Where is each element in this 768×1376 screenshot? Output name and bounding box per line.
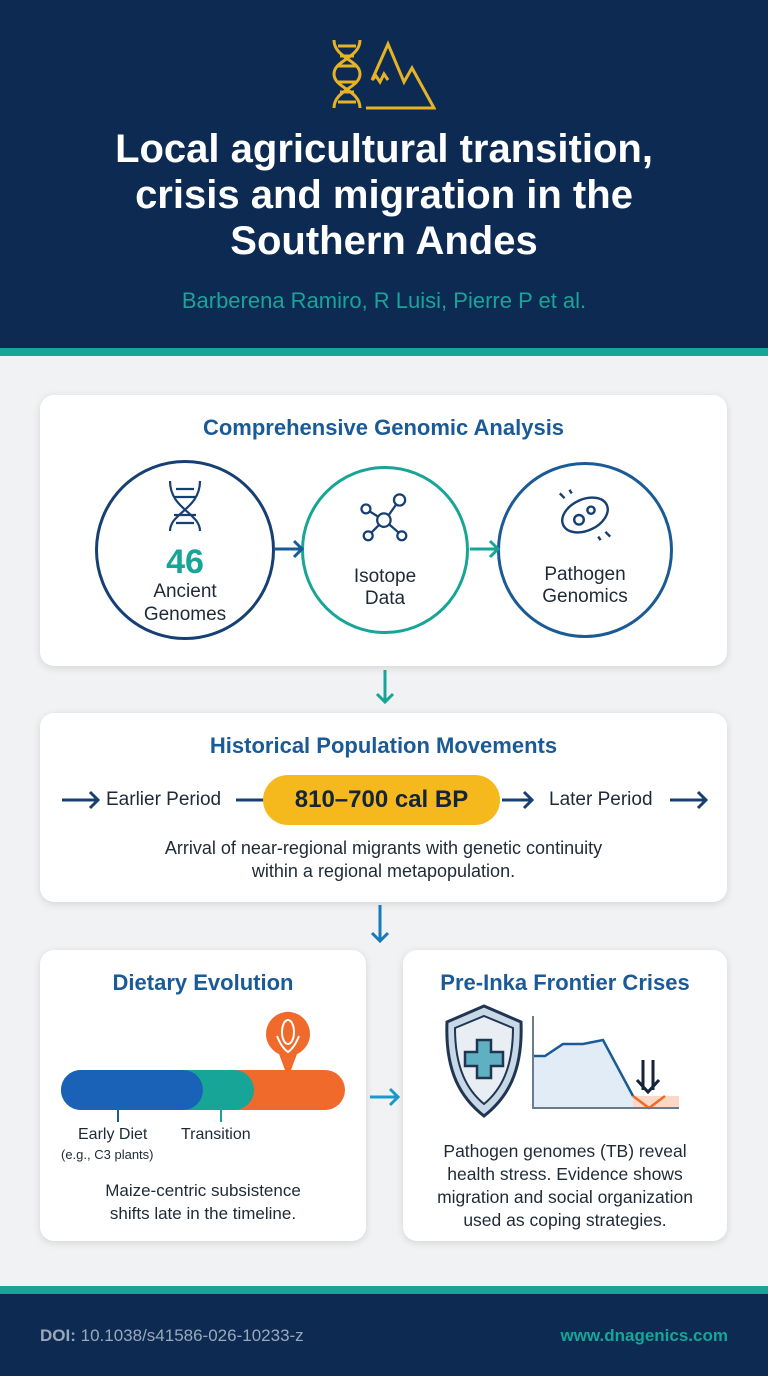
panel: frontier crises: [403, 950, 727, 1241]
timeline: [62, 775, 708, 825]
title: Southern Andes: [230, 219, 538, 263]
icon: dna and mountain: [332, 40, 436, 110]
title: Local agricultural transition,: [115, 127, 653, 171]
icon: maize: [266, 1012, 310, 1070]
website: www.dnagenics.com: [560, 1326, 728, 1345]
panel: population movements: [40, 713, 727, 902]
description: [105, 1181, 301, 1223]
panel: dietary evolution: [40, 950, 366, 1241]
circle: isotope data: Isotope: [354, 566, 416, 587]
description: Maize-centric subsistence: [105, 1181, 301, 1200]
diet bar chart: Transition: [181, 1126, 251, 1143]
heading: Historical Population Movements: [210, 733, 557, 758]
doi: DOI: 10.1038/s41586-026-10233-z: [40, 1326, 304, 1345]
description: Arrival of near-regional migrants with genetic continuity: [165, 838, 602, 858]
heading: Pre-Inka Frontier Crises: [440, 970, 690, 995]
circle: pathogen genomics: Pathogen: [544, 564, 626, 585]
heading: Comprehensive Genomic Analysis: [203, 415, 564, 440]
description: [165, 838, 602, 881]
description: within a regional metapopulation.: [252, 861, 515, 881]
diet bar chart: (e.g., C3 plants): [61, 1147, 154, 1162]
arrow: down: [371, 905, 389, 943]
timeline: 810–700 cal BP: [295, 786, 468, 813]
header: [0, 0, 768, 348]
title: [115, 127, 653, 263]
circle: isotope data: Data: [365, 588, 405, 609]
description: migration and social organization: [437, 1187, 693, 1207]
circle: pathogen genomics: Genomics: [542, 586, 628, 607]
arrow: down: [376, 670, 394, 704]
description: Pathogen genomes (TB) reveal: [443, 1141, 687, 1161]
circle: pathogen genomics: [497, 462, 673, 638]
arrow: [370, 1088, 400, 1106]
chart: decline: [532, 1016, 679, 1110]
authors: Barberena Ramiro, R Luisi, Pierre P et al.: [182, 288, 586, 313]
timeline: Later Period: [549, 789, 653, 810]
icon: shield: [445, 1004, 523, 1118]
circle: ancient genomes: 46: [166, 543, 204, 581]
description: shifts late in the timeline.: [110, 1204, 296, 1223]
circle: ancient genomes: Genomes: [144, 604, 226, 625]
arrow: [274, 540, 304, 558]
diet bar chart: [61, 1012, 345, 1162]
timeline: Earlier Period: [106, 789, 221, 810]
heading: Dietary Evolution: [113, 970, 293, 995]
panel: genomic analysis: [40, 395, 727, 666]
footer: [0, 1286, 768, 1376]
description: [437, 1141, 693, 1230]
circle: ancient genomes: Ancient: [153, 581, 217, 602]
circle: isotope data: [301, 466, 469, 634]
description: health stress. Evidence shows: [447, 1164, 683, 1184]
title: crisis and migration in the: [135, 173, 633, 217]
arrow: [470, 540, 500, 558]
description: used as coping strategies.: [463, 1210, 667, 1230]
diet bar chart: Early Diet: [78, 1126, 147, 1143]
circle: ancient genomes: [95, 460, 275, 640]
